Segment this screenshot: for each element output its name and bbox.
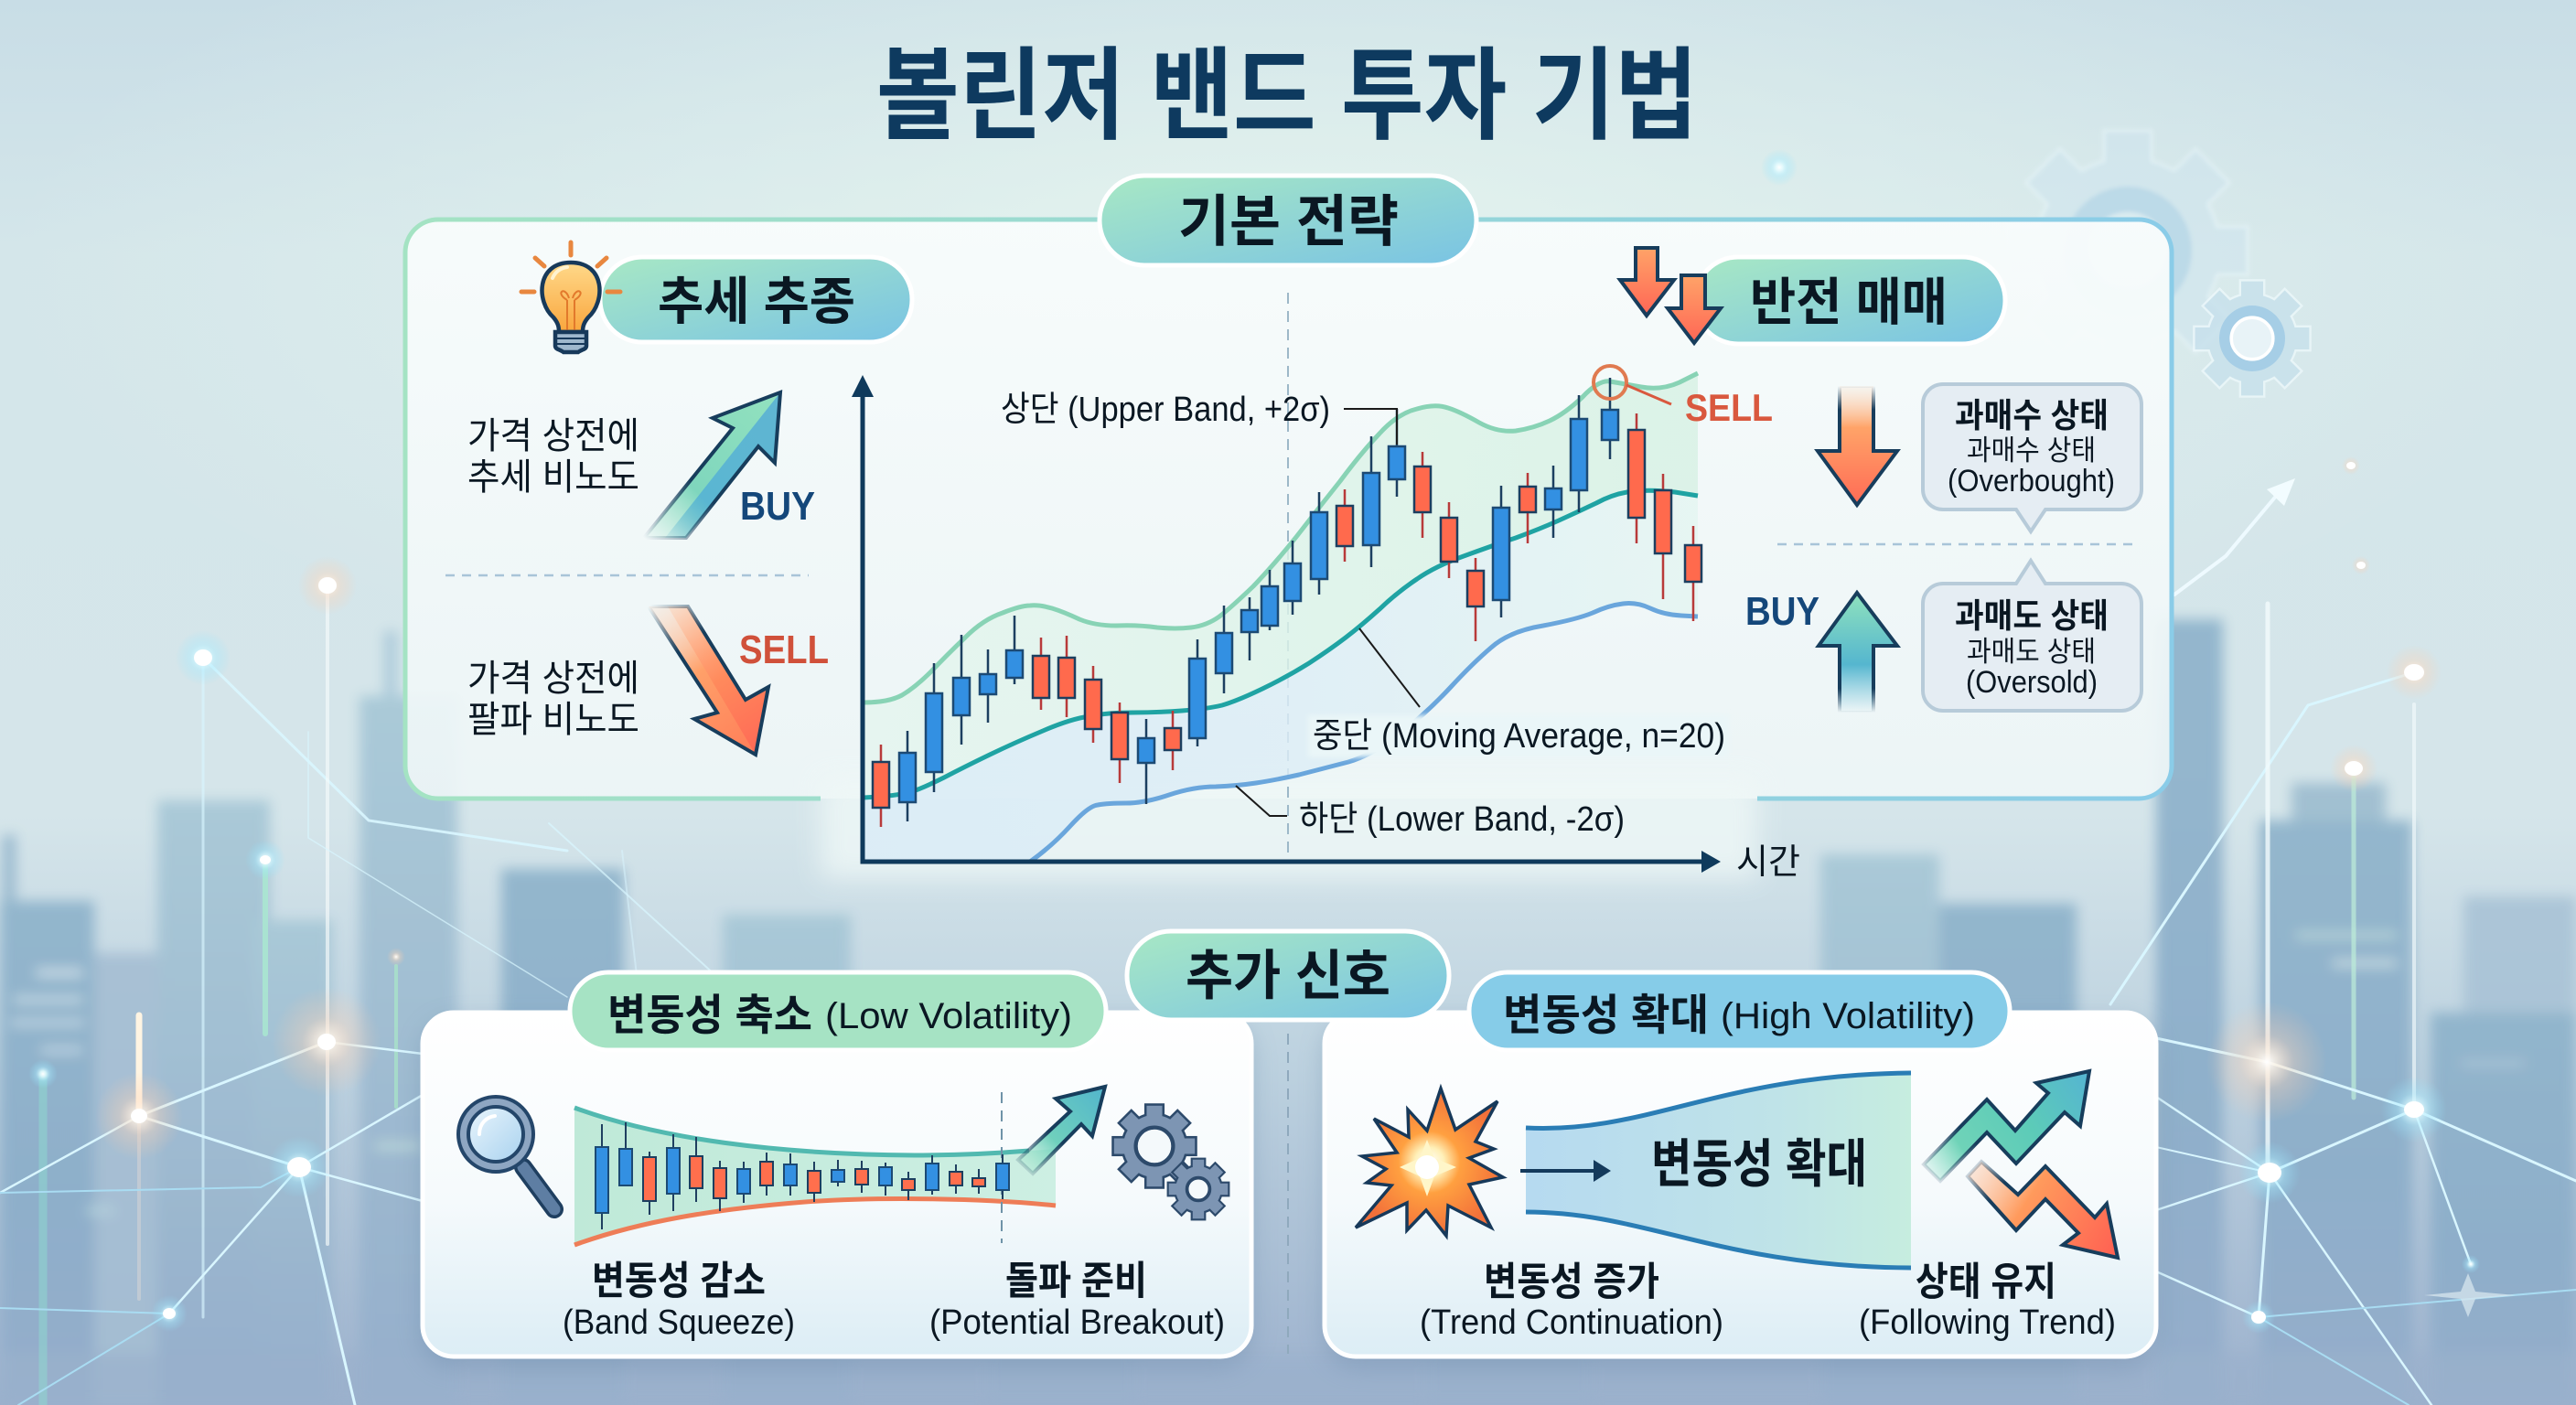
callout: oversold: 과매도 상태 <box>1955 597 2109 635</box>
text: potential breakout: 돌파 준비 <box>1005 1260 1147 1303</box>
callout: oversold: 과매도 상태 <box>1967 636 2096 668</box>
sub heading: high volatility: (High Volatility) <box>1721 996 1975 1036</box>
label: BUY: BUY <box>740 484 815 529</box>
callout: overbought: 과매수 상태 <box>1955 397 2109 434</box>
icon: magnifier <box>458 1097 554 1209</box>
chart: sell marker <box>1594 366 1773 429</box>
callout: oversold <box>1923 561 2141 711</box>
sub heading: low volatility <box>570 972 1106 1050</box>
chart label: upper band: 상단 (Upper Band, +2σ) <box>1001 391 1330 429</box>
sub heading: 추세 추종 <box>600 257 912 342</box>
chart: lower band line <box>1030 604 1698 862</box>
icon: double down arrows <box>1620 248 1721 343</box>
chart: band fills <box>864 373 1698 862</box>
background: blurred city skyline <box>0 619 2576 1405</box>
section heading: 추가 신호: 추가 신호 <box>1186 946 1390 1006</box>
text: trend continuation: (Trend Continuation) <box>1420 1303 1723 1342</box>
chart label: middle band: 중단 (Moving Average, n=20) <box>1313 717 1725 756</box>
text: potential breakout: (Potential Breakout) <box>929 1303 1225 1342</box>
section heading: 기본 전략 <box>1100 176 1476 265</box>
text: band squeeze: 변동성 감소 <box>592 1260 766 1303</box>
panel: basic strategy <box>405 176 2172 882</box>
chart: axes <box>852 375 1721 873</box>
arrow: large sell down <box>1818 386 1897 505</box>
arrow: large buy up <box>1819 593 1897 713</box>
icon: light bulb <box>521 242 620 352</box>
chart label: upper band <box>1001 391 1397 445</box>
chart label: middle band <box>1308 628 1729 757</box>
chart: expanding band funnel <box>1526 1073 1911 1268</box>
text: following trend: 상태 유지 <box>1916 1260 2056 1304</box>
text: buy trend label: 가격 상전에 <box>467 416 639 456</box>
sub heading: 추세 추종: 추세 추종 <box>658 273 855 330</box>
text: trend continuation <box>1420 1260 1723 1342</box>
chart: axis label time: 시간 <box>1736 843 1800 882</box>
callout: oversold: (Oversold) <box>1966 665 2098 700</box>
text: trend continuation: 변동성 증가 <box>1484 1260 1659 1304</box>
chart: bollinger band candlesticks <box>852 293 1800 882</box>
text: following trend <box>1859 1260 2116 1342</box>
background: small glowing gear <box>2195 282 2309 395</box>
text: band squeeze <box>563 1260 795 1342</box>
arrow: buy up-right <box>644 392 780 538</box>
chart: band squeeze <box>574 1092 1056 1245</box>
text: sell trend label <box>467 659 639 740</box>
callout: overbought <box>1923 384 2141 531</box>
callout: overbought: 과매수 상태 <box>1967 434 2096 467</box>
text: sell trend label: 가격 상전에 <box>467 659 639 699</box>
title: 볼린저 밴드 투자 기법 <box>876 40 1698 153</box>
chart label: lower band: 하단 (Lower Band, -2σ) <box>1299 800 1625 839</box>
sub heading: high volatility <box>1469 972 2010 1050</box>
chart: middle band line <box>864 490 1698 798</box>
background: network lines left <box>0 585 759 1405</box>
text: buy trend label <box>467 416 639 498</box>
icon: zigzag down arrow <box>1968 1162 2118 1258</box>
section heading: 추가 신호 <box>1127 931 1449 1020</box>
arrow: sell down-right <box>649 606 768 755</box>
text: funnel label: 변동성 확대 <box>1651 1135 1867 1194</box>
sub heading: 반전 매매: 반전 매매 <box>1750 273 1948 331</box>
chart label: lower band <box>1236 786 1625 839</box>
chart: candlesticks <box>873 378 1701 827</box>
sub heading: 반전 매매 <box>1695 257 2005 344</box>
sub heading: low volatility: 변동성 축소 <box>607 991 812 1039</box>
sub heading: low volatility: (Low Volatility) <box>825 996 1072 1036</box>
background: network lines right <box>2110 494 2576 1405</box>
panel: low volatility <box>423 972 1251 1366</box>
panel: high volatility <box>1325 972 2156 1366</box>
arrow: breakout up-right <box>1018 1087 1105 1174</box>
chart: upper band line <box>864 373 1698 702</box>
chart: sell marker: SELL <box>1685 386 1773 429</box>
text: sell trend label: 팔파 비노도 <box>467 700 639 740</box>
icon: zigzag up arrow <box>1924 1071 2089 1181</box>
background: large glowing gear <box>2009 132 2247 370</box>
icon: explosion <box>1356 1089 1503 1236</box>
arrow: expansion direction <box>1520 1160 1611 1182</box>
label: BUY reversal: BUY <box>1745 589 1819 634</box>
label: SELL: SELL <box>739 627 829 672</box>
callout: overbought: (Overbought) <box>1948 464 2115 499</box>
text: following trend: (Following Trend) <box>1859 1303 2116 1342</box>
text: buy trend label: 추세 비노도 <box>467 457 639 498</box>
text: potential breakout <box>929 1260 1225 1342</box>
icon: gears <box>1114 1106 1228 1218</box>
section heading: 기본 전략: 기본 전략 <box>1178 190 1399 252</box>
sub heading: high volatility: 변동성 확대 <box>1503 991 1709 1039</box>
text: band squeeze: (Band Squeeze) <box>563 1303 795 1342</box>
